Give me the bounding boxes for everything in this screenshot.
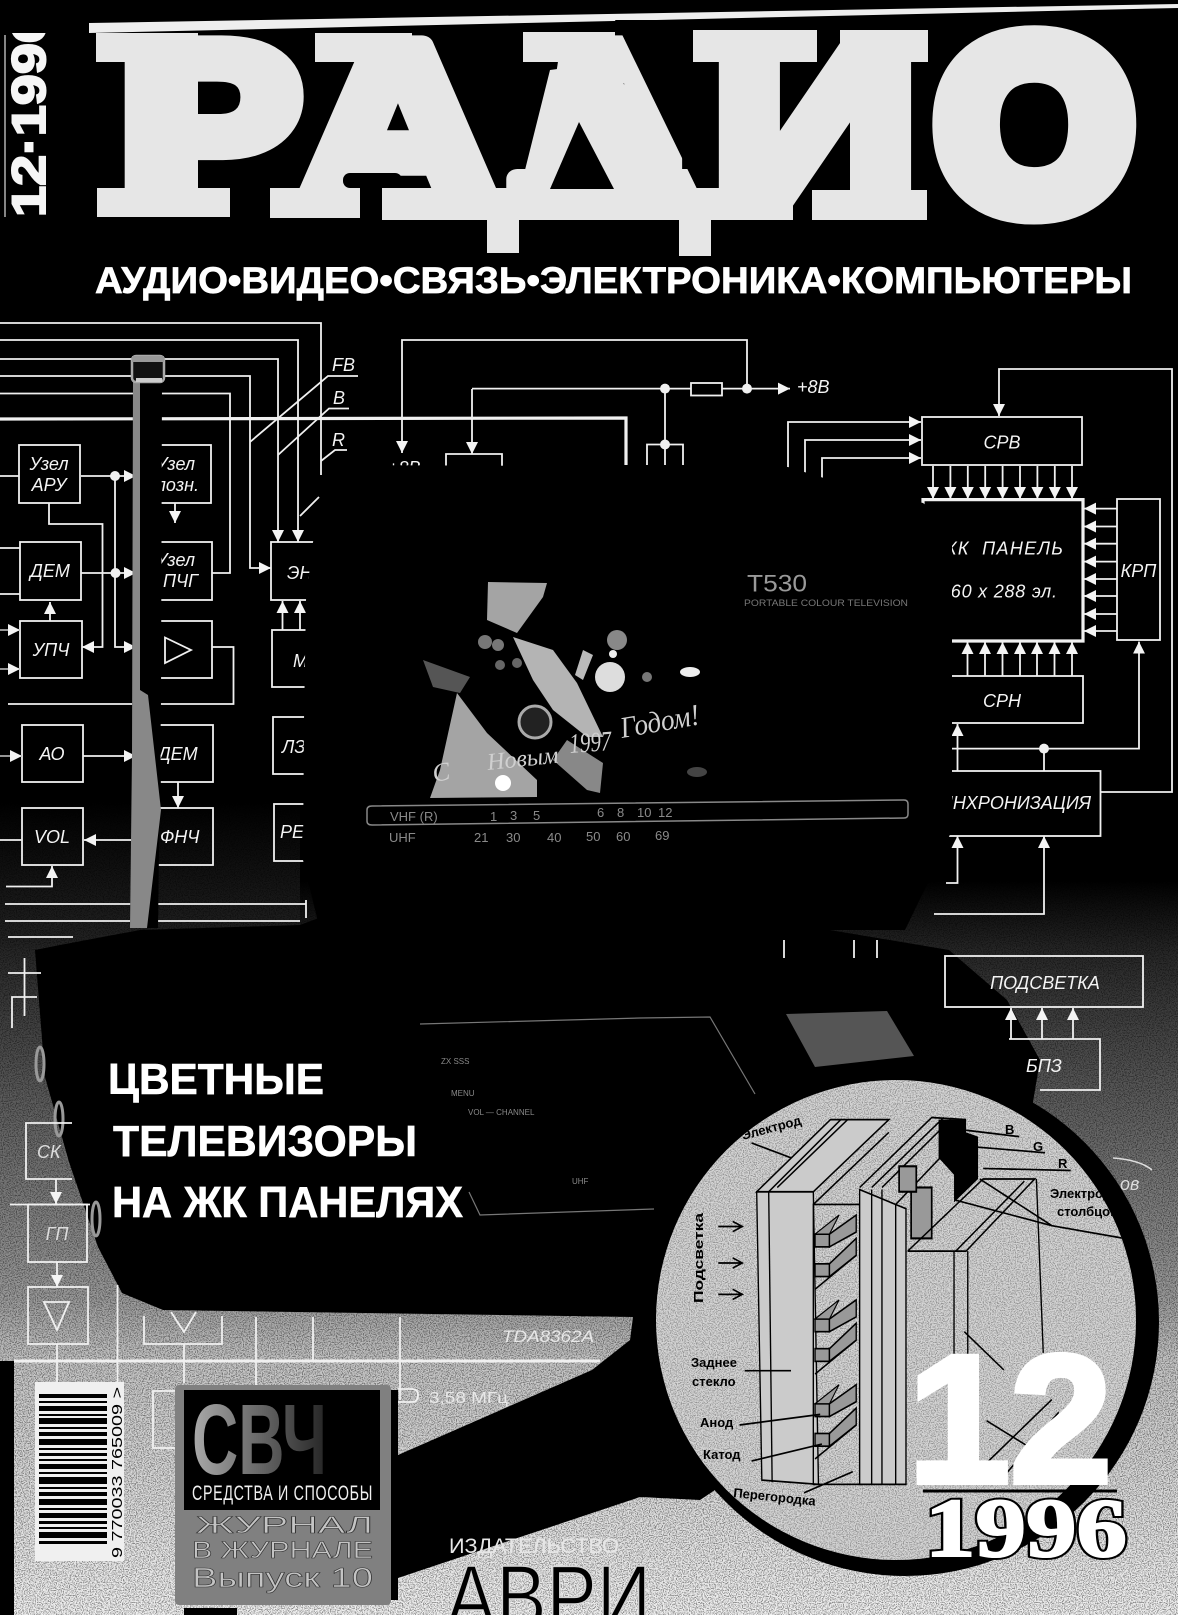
lens labels: Перегородка xyxy=(733,1485,817,1509)
lens labels: Электрод xyxy=(1050,1186,1112,1201)
channel scale: 6 xyxy=(597,805,604,820)
lens labels: столбцов xyxy=(1057,1204,1118,1219)
black television body xyxy=(35,900,1040,1578)
power lines and +8В output: +8В xyxy=(797,377,830,397)
lower-left circuit fragment: 3,58 МГц xyxy=(429,1390,508,1407)
channel scale: 1 xyxy=(490,809,497,824)
issue number: 12: 12 xyxy=(908,1317,1112,1521)
power lines and +8В output xyxy=(388,340,830,478)
power lines and +8В output: +8В xyxy=(388,458,421,478)
ticks above backlight xyxy=(784,940,877,958)
block: ПОДСВЕТКА: ПОДСВЕТКА xyxy=(990,973,1100,993)
block: ЖК панель: 360 х 288 эл. xyxy=(940,582,1057,602)
block: СРВ xyxy=(922,417,1082,465)
right connections xyxy=(788,369,1172,914)
top signal lines: FB xyxy=(332,355,355,375)
subtitle: АУДИО•ВИДЕО•СВЯЗЬ•ЭЛЕКТРОНИКА•КОМПЬЮТЕРЫ xyxy=(95,260,1132,301)
block: СРВ: СРВ xyxy=(983,433,1021,453)
channel scale xyxy=(367,800,908,845)
wedge between Д and И xyxy=(615,20,735,195)
lens speckle xyxy=(650,1075,1140,1565)
hook scribble xyxy=(26,6,44,30)
headline: ЦВЕТНЫЕ xyxy=(108,1055,324,1104)
TV screen picture: 1997 xyxy=(568,726,613,760)
channel scale: 5 xyxy=(533,808,540,823)
block: РЕ xyxy=(274,804,324,861)
body outline detail lines: MENU xyxy=(451,1089,475,1098)
lens labels: Электрод xyxy=(740,1112,803,1143)
year: 1996: 1996 xyxy=(925,1482,1127,1575)
block: triangle amplifier xyxy=(28,1287,88,1344)
block: ДЕМ: ДЕМ xyxy=(28,561,70,581)
TV model label: T530 xyxy=(744,570,908,609)
channel scale: 3 xyxy=(510,808,517,823)
block: ГП: ГП xyxy=(46,1224,69,1244)
TV screen picture: С xyxy=(430,756,453,788)
electrode cells xyxy=(813,1204,860,1484)
block: M xyxy=(272,630,322,687)
booklet text lines xyxy=(192,1512,373,1593)
block: БПЗ: БПЗ xyxy=(1026,1056,1062,1076)
block: M: М xyxy=(293,651,308,671)
TV model label: T530: PORTABLE COLOUR TELEVISION xyxy=(744,598,908,609)
TV model label: T530: T530 xyxy=(747,570,807,598)
block: БПЗ xyxy=(1009,1008,1100,1090)
LCD structure drawing xyxy=(718,1118,1124,1493)
TV screen picture xyxy=(423,582,707,798)
title slab serifs xyxy=(96,30,928,256)
title: РАДИО: А xyxy=(297,0,499,257)
booklet text lines: ЖУРНАЛ xyxy=(196,1512,373,1539)
channel scale: 50 xyxy=(586,829,600,844)
СВЧ booklet xyxy=(175,1384,398,1615)
publisher label: ИЗДАТЕЛЬСТВО xyxy=(449,1535,619,1558)
block: Узел ПЧГ: Узел xyxy=(155,550,195,570)
lens labels xyxy=(691,1112,1118,1509)
channel scale: 21 xyxy=(474,830,488,845)
lens labels: B xyxy=(1005,1122,1014,1137)
faint dither patch behind lower left circuit xyxy=(0,800,300,940)
title: РАДИО: Р xyxy=(118,0,301,258)
block: ЛЗ: ЛЗ xyxy=(281,737,305,757)
block: Узел позн.: позн. xyxy=(156,475,199,495)
block: ДЕМ xyxy=(20,542,81,600)
top signal lines: R xyxy=(332,430,345,450)
block: resonator xyxy=(398,1389,418,1402)
barcode: 9 770033 765009 > xyxy=(109,1387,126,1558)
TV screen picture: Новым xyxy=(485,743,560,776)
lens labels: стекло xyxy=(692,1374,736,1389)
magnifier ring xyxy=(651,1068,1159,1576)
block: УПЧ xyxy=(20,621,82,678)
rule under issue number xyxy=(923,1490,1117,1492)
channel scale: 30 xyxy=(506,830,520,845)
left connections xyxy=(0,471,306,937)
booklet text lines: В ЖУРНАЛЕ xyxy=(192,1537,373,1564)
block: partial box xyxy=(153,1391,178,1448)
channel scale: 8 xyxy=(617,805,624,820)
block: АО: АО xyxy=(38,744,64,764)
headline: НА ЖК ПАНЕЛЯХ xyxy=(112,1178,463,1227)
block: encoder: ЭН xyxy=(287,563,313,583)
body outline detail lines: UHF xyxy=(572,1177,589,1186)
block: Узел ПЧГ xyxy=(150,542,212,600)
block: УПЧ: УПЧ xyxy=(32,640,70,660)
block: VOL: VOL xyxy=(34,827,70,847)
block: Узел позн. xyxy=(150,445,211,503)
leader lines and arrows xyxy=(718,1130,1071,1493)
lens labels: Анод xyxy=(700,1415,734,1430)
block: ЛЗ xyxy=(273,717,323,774)
channel scale: 60 xyxy=(616,829,630,844)
block: ДЕМ 2 xyxy=(150,725,213,782)
black television screen mask xyxy=(303,465,952,930)
block: СРН: СРН xyxy=(983,691,1022,711)
front glass layers xyxy=(860,1118,978,1484)
block: СК: СК xyxy=(37,1142,62,1162)
block: ДЕМ 2: ДЕМ xyxy=(156,744,198,764)
block: Узел ПЧГ: ПЧГ xyxy=(163,571,199,591)
lens labels: Заднее xyxy=(691,1355,737,1370)
back glass xyxy=(757,1120,889,1484)
channel scale: 12 xyxy=(658,805,672,820)
grey gradient lower area xyxy=(0,880,1178,1615)
booklet text lines: Выпуск 10 xyxy=(192,1562,373,1593)
channel scale: 10 xyxy=(637,805,651,820)
block: ГП xyxy=(28,1204,87,1262)
lens labels: Подсветка xyxy=(691,1212,706,1303)
headline xyxy=(108,1055,463,1227)
block: ЖК панель xyxy=(923,500,1083,641)
title: РАДИО: Д xyxy=(515,0,699,257)
block: amplifier triangle xyxy=(150,621,212,678)
block: СК xyxy=(26,1123,72,1179)
block: second triangle amplifier xyxy=(144,1312,222,1344)
body outline detail lines xyxy=(420,1011,914,1215)
TV screen picture: Годом! xyxy=(617,699,702,745)
lens labels: G xyxy=(1033,1139,1043,1154)
lens labels: R xyxy=(1058,1156,1068,1171)
magnifier lens xyxy=(656,1080,1136,1560)
body outline detail lines: VOL — CHANNEL xyxy=(468,1108,535,1117)
headline: ТЕЛЕВИЗОРЫ xyxy=(113,1117,417,1166)
booklet subtitle: СРЕДСТВА И СПОСОБЫ xyxy=(192,1482,373,1505)
block: Узел АРУ: Узел xyxy=(28,454,69,474)
block: ПОДСВЕТКА xyxy=(945,956,1143,1007)
block: ФНЧ: ФНЧ xyxy=(160,827,200,847)
block: ФНЧ xyxy=(150,808,213,865)
side issue label: 12·1996 xyxy=(2,12,55,217)
block: СРН xyxy=(930,676,1083,723)
outside label: В: ов xyxy=(1120,1174,1139,1194)
circuit diagram xyxy=(0,323,1172,937)
channel scale: 69 xyxy=(655,828,669,843)
channel scale: 40 xyxy=(547,830,561,845)
masthead top white strip xyxy=(89,4,1178,33)
block: АО xyxy=(22,725,83,782)
lower-left circuit fragment xyxy=(8,958,600,1448)
block: Узел АРУ xyxy=(19,445,80,503)
block: Узел позн.: Узел xyxy=(155,454,195,474)
title notch under А xyxy=(343,122,614,220)
top signal lines: B xyxy=(333,388,345,408)
block: ЖК панель: ЖК ПАНЕЛЬ xyxy=(939,539,1063,559)
block: РЕ: РЕ xyxy=(280,822,305,842)
block: encoder xyxy=(271,542,331,600)
front block xyxy=(908,1179,1124,1484)
channel scale: VHF (R) xyxy=(390,809,438,824)
block: Узел АРУ: АРУ xyxy=(31,475,68,495)
barcode xyxy=(35,1382,126,1561)
left black edge strip xyxy=(0,1361,14,1615)
antenna xyxy=(130,356,164,928)
outside label: В xyxy=(1113,1158,1152,1194)
body outline detail lines: ZX SSS xyxy=(441,1057,469,1066)
block: СИНХРОНИЗАЦИЯ: СИНХРОНИЗАЦИЯ xyxy=(927,793,1092,813)
TV side jacks xyxy=(36,1047,100,1236)
СВЧ big letters: СВЧ xyxy=(192,1384,327,1496)
top signal lines xyxy=(0,323,626,573)
channel scale: UHF xyxy=(389,830,416,845)
lower-left circuit fragment: TDA8362A xyxy=(502,1327,594,1346)
title: РАДИО xyxy=(96,0,1131,258)
lens contents clipped to circle xyxy=(691,1112,1124,1509)
block: КРП xyxy=(1117,499,1160,640)
block: VOL xyxy=(22,808,83,865)
title: РАДИО: И xyxy=(712,0,918,257)
year: 1996: 1996 xyxy=(925,1482,1127,1575)
block: СИНХРОНИЗАЦИЯ xyxy=(900,771,1100,836)
lens labels: Катод xyxy=(703,1447,741,1462)
block: КРП: КРП xyxy=(1121,561,1157,581)
